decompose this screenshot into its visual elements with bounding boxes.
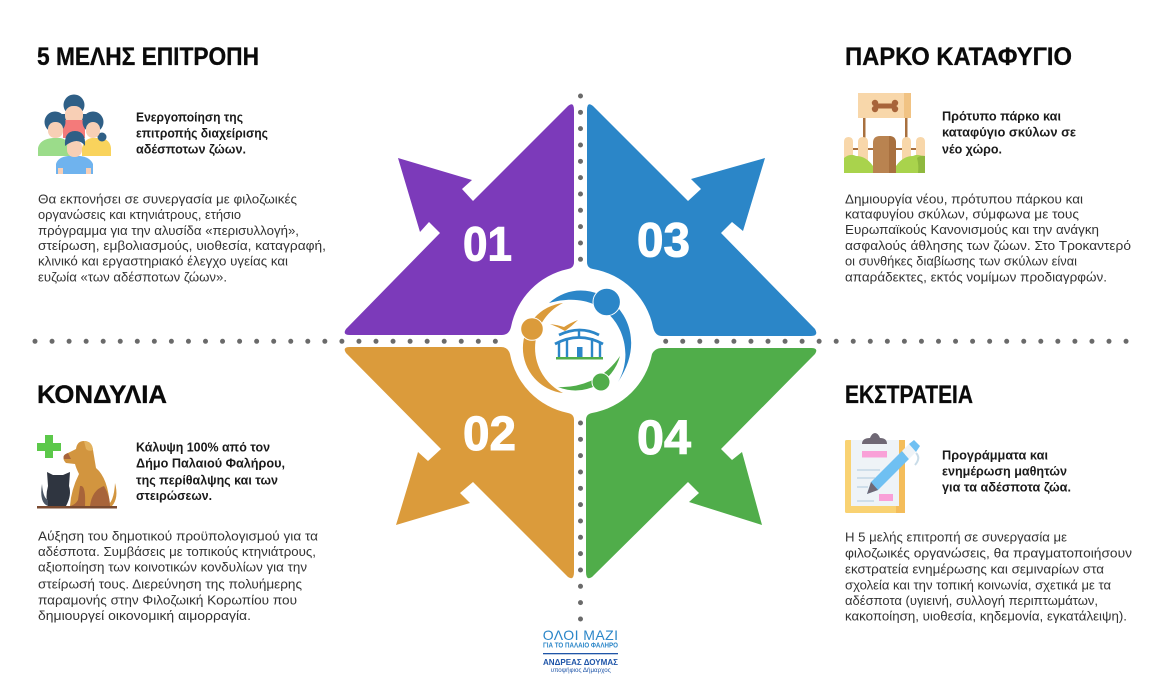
arrow: purple 01: [345, 104, 574, 335]
subheading: επιτροπής διαχείρισης: [136, 126, 268, 140]
subheading: αδέσποτων ζώων.: [136, 142, 246, 156]
body text: [38, 529, 318, 623]
icon: clipboard and pen: [845, 433, 920, 513]
body text: αδέσποτα (υγιεινή, συλλογή περιπτωμάτων,: [845, 593, 1098, 608]
subheading: Ενεργοποίηση της: [136, 111, 243, 125]
logo node: gold: [521, 318, 543, 340]
subheading: στειρώσεων.: [136, 489, 212, 503]
subheading: της περίθαλψης και των: [136, 473, 278, 487]
subheading: [942, 448, 1071, 495]
body text: [845, 191, 1131, 285]
body text: οι συνθήκες διαβίωσης των σκύλων είναι: [845, 254, 1077, 269]
body text: [38, 191, 326, 285]
number 03: 03: [637, 215, 690, 268]
icon: people: [38, 94, 111, 174]
number 02: 02: [463, 408, 516, 461]
body text: Δημιουργία νέου, πρότυπου πάρκου και: [845, 191, 1083, 206]
arrow: blue 03: [587, 104, 816, 336]
heading: 5 ΜΕΛΗΣ ΕΠΙΤΡΟΠΗ: [37, 43, 259, 71]
footer logo: [543, 627, 618, 674]
subheading: Κάλυψη 100% από τον: [136, 441, 270, 455]
panel: 5 member committee: [37, 43, 326, 285]
subheading: [942, 110, 1076, 156]
heading: ΕΚΣΤΡΑΤΕΙΑ: [845, 381, 973, 409]
body text: Θα εκπονήσει σε συνεργασία με φιλοζωικές: [38, 191, 297, 206]
heading: ΚΟΝΔΥΛΙΑ: [37, 381, 167, 409]
body text: οργανώσεις και κτηνιάτρους, ετήσιο: [38, 207, 241, 222]
candidate role: υποψήφιος Δήμαρχος: [551, 667, 611, 674]
logo ring: blue crescent: [549, 290, 631, 382]
body text: αξιοποίηση των κοινοτικών κονδυλίων για την: [38, 560, 307, 575]
subheading: [136, 111, 268, 156]
panel: campaign: [845, 381, 1132, 624]
subheading: Δήμο Παλαιού Φαλήρου,: [136, 457, 285, 471]
logo ring: green crescent: [558, 356, 620, 390]
logo node: green: [592, 373, 610, 391]
footer divider: [543, 653, 618, 654]
body text: εκστρατεία ενημέρωσης και σεμιναρίων στα: [845, 561, 1104, 576]
subheading: νέο χώρο.: [942, 142, 1002, 156]
body text: καταφυγίου σκύλων, σύμφωνα με τους: [845, 206, 1079, 221]
arrow: gold 02: [345, 347, 574, 578]
body text: κακοποίηση, υιοθεσία, κηδεμονία, εγκατάλειψη).: [845, 609, 1127, 624]
body text: [845, 530, 1132, 624]
body text: δημιουργεί οικονομική αιμορραγία.: [38, 608, 251, 623]
center logo: [521, 288, 631, 393]
candidate name: ΑΝΔΡΕΑΣ ΔΟΥΜΑΣ: [543, 657, 618, 667]
logo building: [555, 330, 603, 360]
subheading: Προγράμματα και: [942, 448, 1049, 462]
logo bird: [550, 320, 578, 331]
body text: ευζωία «των αδέσποτων ζώων».: [38, 270, 227, 285]
subheading: καταφύγιο σκύλων σε: [942, 126, 1076, 140]
subheading: ενημέρωση μαθητών: [942, 465, 1067, 479]
number 04: 04: [637, 412, 691, 465]
body text: ασφαλούς άθλησης των ζώων. Στο Τροκαντερό: [845, 238, 1131, 253]
body text: απαράδεκτες, εκτός νομίμων προδιαγρφών.: [845, 270, 1107, 285]
number 01: 01: [463, 219, 512, 272]
campaign name: ΟΛΟΙ ΜΑΖΙ: [543, 627, 618, 643]
panel: shelter park: [844, 43, 1131, 285]
panel: funding: [37, 381, 318, 623]
body text: κλινικό και εργαστηριακό έλεγχο υγείας και: [38, 254, 288, 269]
subheading: για τα αδέσποτα ζώα.: [942, 481, 1071, 495]
body text: φιλοζωικές οργανώσεις, θα πραγματοποιήσουν: [845, 545, 1132, 560]
body text: πρόγραμμα για την αλυσίδα «περισυλλογή»,: [38, 223, 299, 238]
body text: Η 5 μελής επιτροπή σε συνεργασία με: [845, 530, 1067, 545]
subheading: [136, 441, 285, 503]
campaign tagline: ΓΙΑ ΤΟ ΠΑΛΑΙΟ ΦΑΛΗΡΟ: [543, 643, 618, 650]
body text: Ευρωπαϊκούς Κανονισμούς και την ανάγκη: [845, 222, 1099, 237]
body text: παραμονής στην Φιλοζωική Κορωπίου που: [38, 592, 297, 607]
subheading: Πρότυπο πάρκο και: [942, 110, 1062, 124]
logo ring: gold crescent: [523, 303, 563, 393]
icon: dog and cat: [37, 435, 117, 508]
body text: στείρωση, εμβολιασμούς, υιοθεσία, καταγραφή,: [38, 238, 326, 253]
body text: σχολεία και την τοπική κοινωνία, σχετικά με τα: [845, 577, 1111, 592]
body text: αδέσποτα. Συμβάσεις με τοπικούς κτηνιάτρους,: [38, 544, 316, 559]
icon: dog park: [844, 93, 925, 173]
body text: στείρωσή τους. Διερεύνηση της πολυήμερης: [38, 576, 302, 591]
heading: ΠΑΡΚΟ ΚΑΤΑΦΥΓΙΟ: [845, 43, 1072, 71]
body text: Αύξηση του δημοτικού προϋπολογισμού για τα: [38, 529, 318, 544]
arrow: green 04: [586, 348, 816, 578]
logo node: blue: [593, 288, 620, 316]
